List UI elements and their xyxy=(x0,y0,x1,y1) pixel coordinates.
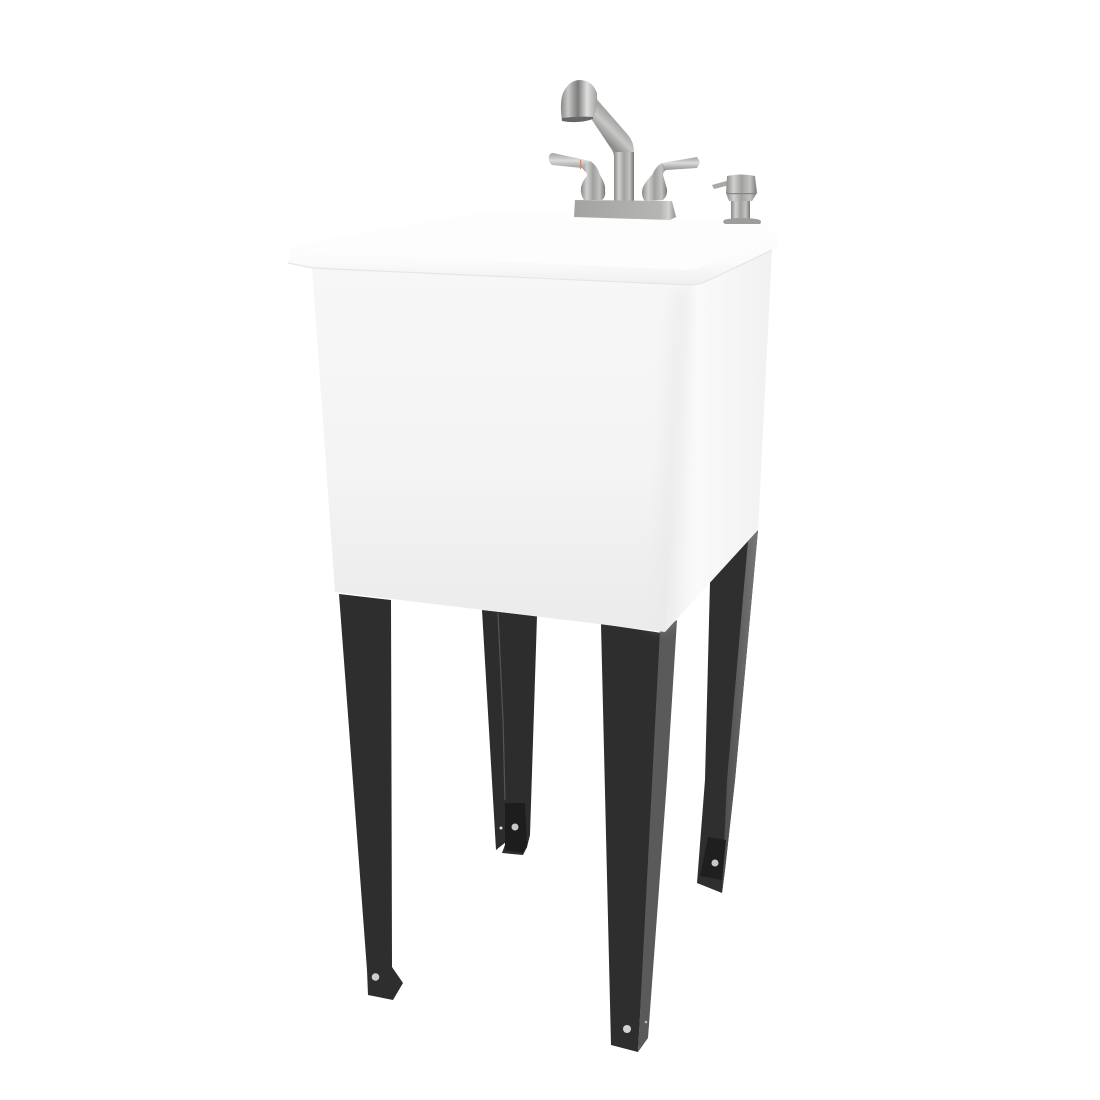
right face of tub xyxy=(665,250,772,632)
dispenser head xyxy=(726,174,757,201)
dispenser lever xyxy=(712,178,738,189)
soap dispenser xyxy=(712,174,761,224)
front leg xyxy=(601,620,677,1052)
faucet base plate xyxy=(574,200,676,220)
tub rim xyxy=(288,210,779,285)
tub xyxy=(288,210,779,632)
left handle xyxy=(549,153,590,172)
dispenser base xyxy=(723,218,761,224)
right handle xyxy=(660,157,700,172)
left face of tub xyxy=(312,266,700,632)
rim top surface xyxy=(296,210,776,270)
back right leg xyxy=(697,530,758,893)
back left leg xyxy=(482,610,537,855)
rim lower edge xyxy=(288,250,772,285)
head nozzle ring xyxy=(562,117,593,122)
faucet pull-out head xyxy=(561,80,597,122)
corner shading xyxy=(652,290,690,628)
faucet spout neck xyxy=(592,97,634,170)
faucet stem xyxy=(614,152,634,201)
front left leg xyxy=(339,594,403,1000)
dispenser collar xyxy=(731,200,750,219)
faucet xyxy=(549,80,700,220)
